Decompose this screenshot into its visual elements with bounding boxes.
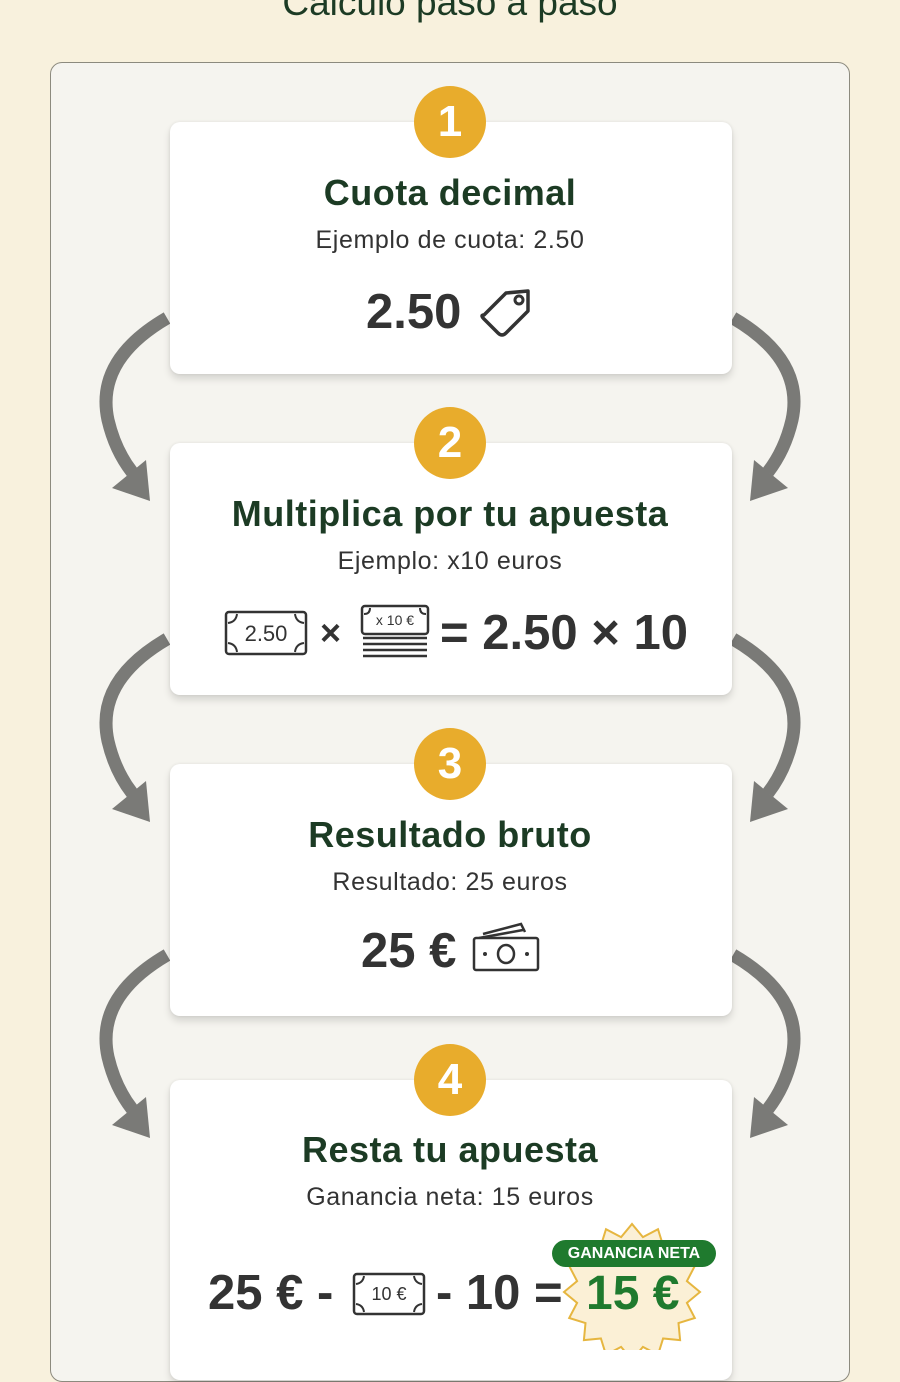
step 4 subtitle: Ganancia neta: 15 euros xyxy=(306,1183,594,1211)
badge 3: 3 xyxy=(438,739,462,788)
step 1 subtitle: Ejemplo de cuota: 2.50 xyxy=(316,226,584,254)
icon: tag xyxy=(480,289,530,337)
step 2 formula: = 2.50 × 10 xyxy=(440,606,688,660)
step 2 formula xyxy=(224,604,688,660)
icon: bill 2.50: 2.50 xyxy=(245,621,287,646)
arrow: right 1 xyxy=(733,318,794,501)
callout: net profit starburst xyxy=(552,1222,716,1350)
step 2 formula: × xyxy=(320,612,341,653)
step 4 formula: - 10 = xyxy=(436,1266,563,1320)
card 3 xyxy=(170,764,732,1016)
step 2 subtitle: Ejemplo: x10 euros xyxy=(338,547,562,575)
arrow: left 3 xyxy=(106,955,167,1138)
step 4 heading: Resta tu apuesta xyxy=(302,1129,598,1170)
arrow: right 2 xyxy=(733,639,794,822)
callout: net profit starburst: 15 € xyxy=(586,1267,679,1320)
step 3 heading: Resultado bruto xyxy=(308,814,592,855)
step 3 value xyxy=(361,922,540,978)
badge 1: 1 xyxy=(438,97,462,146)
icon: bill 10: 10 € xyxy=(371,1284,407,1304)
arrow: left 1 xyxy=(106,318,167,501)
badge 4 xyxy=(414,1044,486,1116)
card 4 xyxy=(170,1080,732,1380)
icon: bill 10 xyxy=(352,1272,426,1316)
label pill xyxy=(552,1240,716,1267)
step 4 formula xyxy=(208,1266,563,1320)
step 4 formula: 25 € - xyxy=(208,1266,333,1320)
step 3 subtitle: Resultado: 25 euros xyxy=(332,868,568,896)
badge 3 xyxy=(414,728,486,800)
icon: bill stack xyxy=(360,604,430,658)
step 3 value: 25 € xyxy=(361,924,456,978)
badge 4: 4 xyxy=(438,1055,462,1104)
label pill: GANANCIA NETA xyxy=(568,1245,700,1262)
step 1 heading: Cuota decimal xyxy=(324,172,576,213)
card 2 xyxy=(170,443,732,695)
step 2 heading: Multiplica por tu apuesta xyxy=(232,493,668,534)
arrow: left 2 xyxy=(106,639,167,822)
badge 2 xyxy=(414,407,486,479)
card 1 xyxy=(170,122,732,374)
icon: cash xyxy=(472,922,540,972)
step 1 value: 2.50 xyxy=(366,285,461,339)
icon: bill 2.50 xyxy=(224,610,308,656)
badge 2: 2 xyxy=(438,418,462,467)
arrow: right 3 xyxy=(733,955,794,1138)
step 1 value xyxy=(366,285,530,339)
icon: bill stack: x 10 € xyxy=(376,612,414,628)
badge 1 xyxy=(414,86,486,158)
